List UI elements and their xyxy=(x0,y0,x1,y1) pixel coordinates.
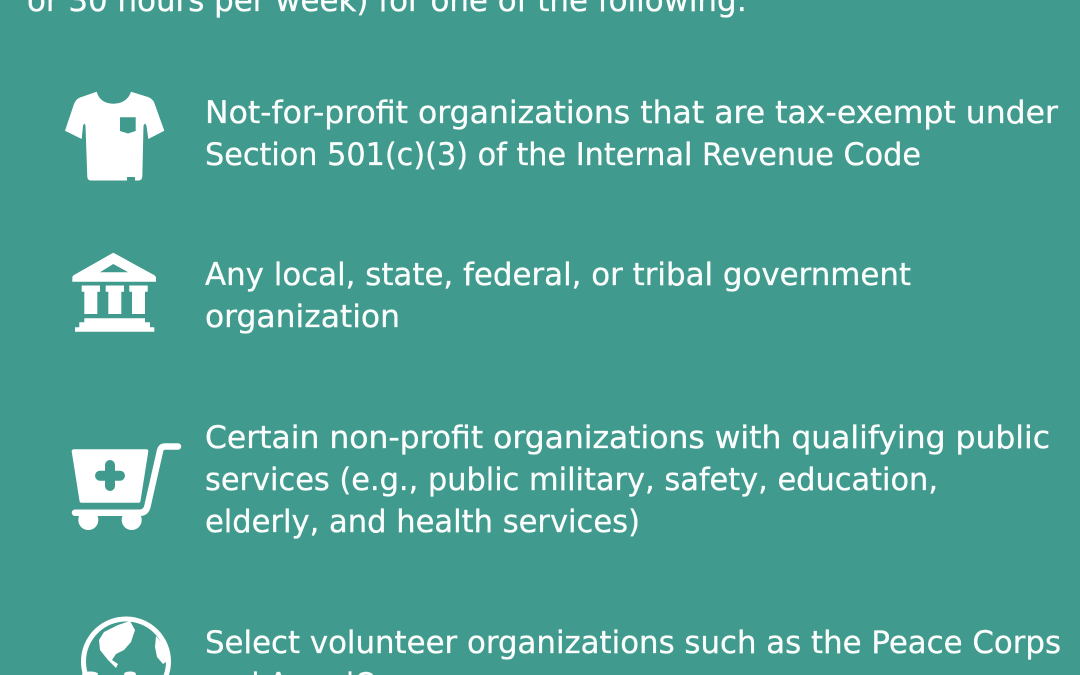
icon: globe xyxy=(82,619,169,675)
text: public service non-profits: Certain non-profit organizations with qualifying public xyxy=(205,420,1050,456)
text: government organizations xyxy=(205,257,911,335)
text: not-for-profit organizations: Section 501(c)(3) of the Internal Revenue Code xyxy=(205,137,921,173)
text: government organizations: Any local, state, federal, or tribal government xyxy=(205,257,911,293)
text: volunteer organizations: Select volunteer organizations such as the Peace Corps xyxy=(205,625,1061,661)
text: government organizations: organization xyxy=(205,299,400,335)
text: public service non-profits: services (e.g., public military, safety, education, xyxy=(205,462,938,498)
text: not-for-profit organizations xyxy=(205,95,1058,173)
text: not-for-profit organizations: Not-for-profit organizations that are tax-exempt under xyxy=(205,95,1058,131)
icon: medical cart xyxy=(74,446,178,530)
icon: t-shirt xyxy=(65,92,164,180)
text: public service non-profits xyxy=(205,420,1050,540)
icon: government building xyxy=(72,253,156,332)
text: public service non-profits: elderly, and health services) xyxy=(205,504,640,540)
